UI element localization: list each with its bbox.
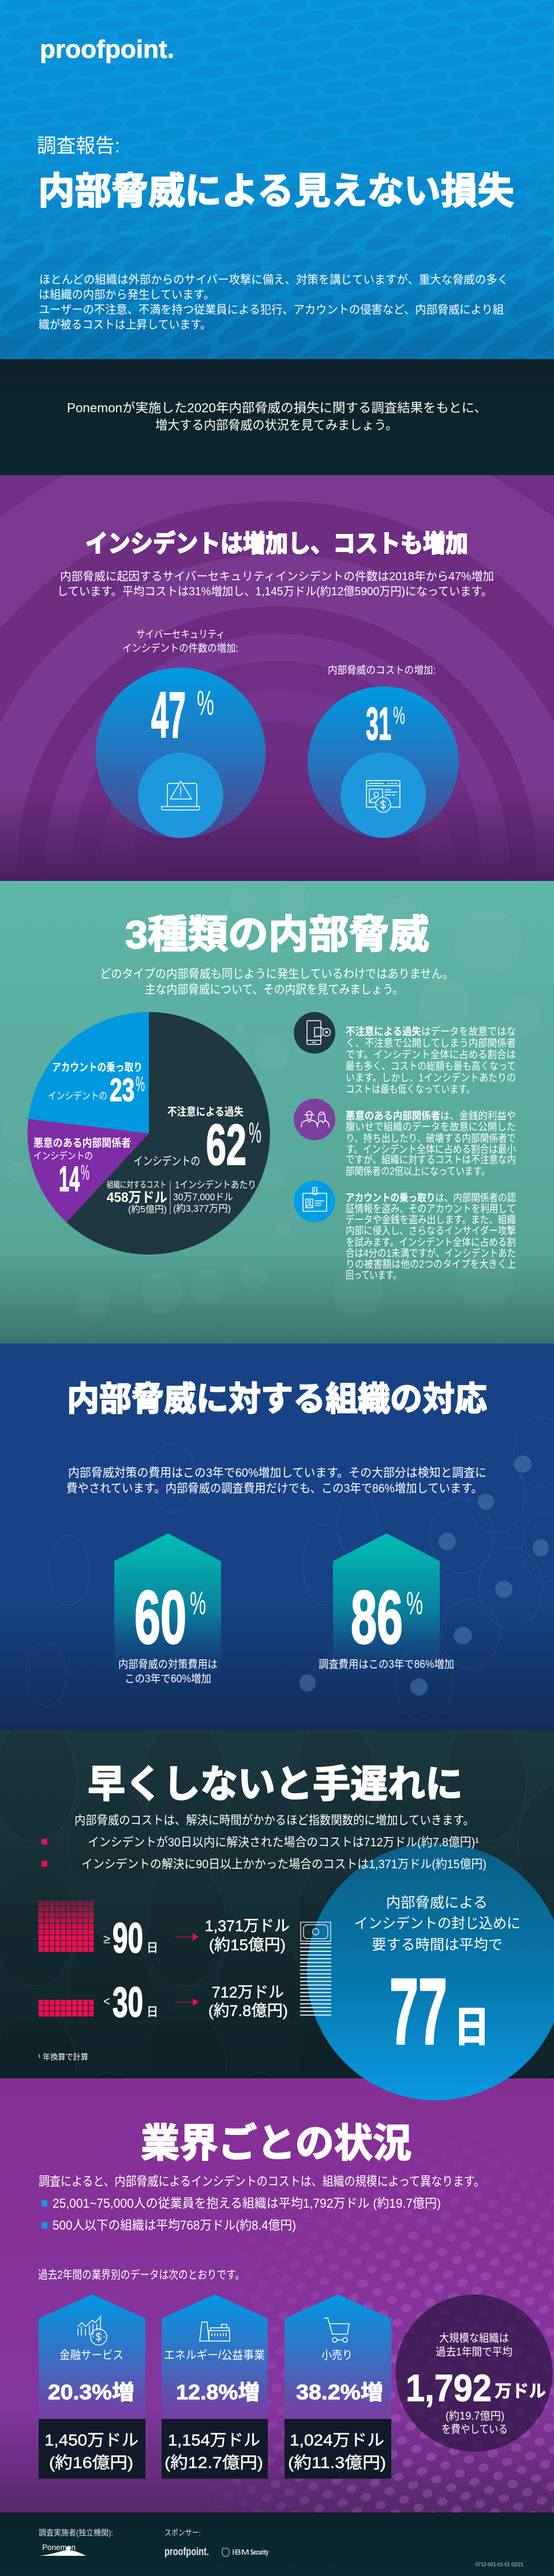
column: energy and utilities: 12.8%増: [176, 2380, 260, 2404]
logo: Ponemon: [39, 2543, 86, 2556]
callout: large organization spend: [396, 2294, 553, 2451]
careless cost figures: 458万ドル: [107, 1190, 167, 1205]
bullet: 30 days: インシデントが30日以内に解決された場合のコストは712万ドル(約7.8億円)¹: [88, 1836, 479, 1849]
panel: hero: [0, 0, 554, 359]
intro band text: 増大する内部脅威の状況を見てみましょう。: [155, 418, 398, 432]
stat circle: 31%: 31: [366, 698, 391, 749]
chart: 30 day row: <: [103, 1994, 110, 2008]
text: careless description: 不注意による過失はデータを故意ではな: [346, 1025, 516, 1037]
label: incident increase: インシデントの件数の増加:: [122, 643, 238, 654]
chart: 30 day row: (約7.8億円): [208, 2002, 288, 2019]
heading: 内部脅威に対する組織の対応: [67, 1380, 487, 1418]
paragraph: [100, 968, 454, 996]
text: account takeover description: 内部に侵入し、さらなるインサイダー攻撃: [346, 1224, 516, 1237]
chart: 30 day row: [38, 1979, 288, 2026]
logo: IBM Security: IBM: [232, 2548, 249, 2556]
text: careless description: です。インシデント全体に占める割合は: [346, 1048, 516, 1061]
intro text: は組織の内部から発生しています。: [39, 288, 215, 301]
stat circle: 47%: %: [197, 684, 214, 722]
panel: organizational response: [0, 1343, 554, 1730]
careless cost figures: 1インシデントあたり: [175, 1179, 256, 1190]
callout: large organization spend: (約19.7億円): [446, 2410, 504, 2422]
column: financial services: 金融サービス: [59, 2349, 123, 2362]
stat arrow: 86%: 86: [351, 1575, 403, 1659]
title: 内部脅威による見えない損失: [38, 170, 514, 212]
text: malicious description: す。インシデント全体に占める割合は最小: [346, 1143, 516, 1155]
text: account takeover description: りの被害額は他の2つのタイプを大きく上: [346, 1258, 516, 1270]
careless cost figures: 30万7,000ドル: [173, 1192, 233, 1203]
panel: three insider threat types: [0, 881, 554, 1343]
column: retail: [285, 2294, 391, 2479]
label: malicious insider: 悪意のある内部関係者: [33, 1137, 131, 1149]
heading: インシデントは増加し、コストも増加: [85, 530, 468, 557]
text: malicious description: り、持ち出したり、破壊する内部関係者で: [346, 1132, 516, 1144]
stat arrow: 86%: [319, 1533, 454, 1677]
bullet: 90 days: インシデントの解決に90日以上かかった場合のコストは1,371万ドル(約15億円): [81, 1858, 486, 1871]
stat circle: 47%: [96, 667, 265, 838]
bullet: large organizations: 25,001~75,000人の従業員を抱える組織は平均1,792万ドル (約19.7億円): [53, 2196, 441, 2211]
label: cost increase: 内部脅威のコストの増加:: [328, 664, 436, 676]
text: careless description: く、不注意で公開してしまう内部関係者: [346, 1037, 516, 1049]
chart: 30 day row: 日: [147, 2006, 158, 2019]
column: retail: (約11.3億円): [288, 2454, 386, 2472]
paragraph: [66, 1466, 486, 1495]
logo: Ponemon: Ponemon: [42, 2543, 76, 2552]
text: careless description: コストは最も低くなっています。: [346, 1083, 475, 1095]
subtitle: 調査報告:: [37, 135, 120, 157]
column: energy and utilities: 1,154万ドル: [168, 2431, 260, 2449]
column: energy and utilities: [162, 2294, 268, 2479]
column: financial services: (約16億円): [49, 2454, 133, 2472]
careless cost figures: 組織に対するコスト: [107, 1180, 166, 1190]
paragraph: 調査によると、内部脅威によるインシデントのコストは、組織の規模によって異なります。: [39, 2174, 485, 2189]
label: careless: 62: [206, 1112, 246, 1177]
pie chart: %: [136, 1072, 145, 1096]
subheading: 過去2年間の業界別のデータは次のとおりです。: [38, 2268, 245, 2282]
paragraph: しています。平均コストは31%増加し、1,145万ドル(約12億5900万円)になっています。: [57, 585, 492, 598]
label: careless: [133, 1106, 261, 1177]
label: malicious insider: %: [81, 1160, 89, 1184]
logo: proofpoint: proofpoint.: [164, 2546, 209, 2558]
stat arrow: 60%: [114, 1533, 221, 1685]
paragraph: 主な内部脅威について、その内訳を見てみましょう。: [145, 983, 403, 996]
chart: 90 day row: [38, 1901, 289, 1954]
text: malicious description: 部関係者の2倍以上になっています。: [346, 1165, 490, 1177]
logo: proofpoint: proofpoint.: [40, 35, 174, 64]
text: account takeover description: 回っています。: [346, 1269, 401, 1281]
callout: large organization spend: 過去1年間で平均: [436, 2346, 512, 2358]
chart: 30 day row: 712万ドル: [212, 1984, 284, 2001]
callout: large organization spend: 大規模な組織は: [439, 2332, 509, 2344]
label: account takeover: インシデントの: [48, 1090, 107, 1102]
logo: IBM Security: Security: [250, 2548, 268, 2556]
icon: stack of bills: [301, 1922, 331, 2017]
text: account takeover description: を試みます。インシデント全体に占める割: [346, 1236, 516, 1248]
intro band text: [67, 401, 487, 432]
heading: 早くしないと手遅れに: [88, 1763, 463, 1805]
paragraph: 費やされています。内部脅威の調査費用だけでも、この3年で86%増加しています。: [66, 1482, 482, 1495]
chart: 90 day row: ≥: [103, 1932, 110, 1946]
paragraph: 内部脅威対策の費用はこの3年で60%増加しています。その大部分は検知と調査に: [68, 1466, 486, 1480]
icon: factory: [200, 2322, 230, 2341]
intro text: ほとんどの組織は外部からのサイバー攻撃に備え、対策を講じていますが、重大な脅威の多く: [39, 273, 508, 286]
callout: large organization spend: を費やしている: [441, 2423, 508, 2436]
panel: Ponemon intro band: [0, 359, 554, 475]
paragraph: 内部脅威に起因するサイバーセキュリティインシデントの件数は2018年から47%増加: [60, 570, 494, 583]
text: malicious description: [346, 1110, 516, 1177]
stat circle: 31%: %: [393, 702, 405, 730]
text: careless description: います。しかし、1インシデントあたりの: [346, 1072, 516, 1084]
icon: phone and key: [294, 1012, 335, 1054]
document code: 0712-001-01-01 02/21: [476, 2562, 523, 2567]
column: retail: 1,024万ドル: [290, 2431, 384, 2449]
icon: shopping cart: [324, 2318, 349, 2342]
text: malicious description: ですが、組織に対するコストは不注意な内: [346, 1153, 516, 1166]
text: account takeover description: データや金銭を盗み出します。また、組織: [346, 1214, 516, 1226]
stat arrow: 60%: %: [190, 1585, 206, 1622]
icon: two people: [294, 1099, 335, 1140]
intro text: [39, 273, 508, 331]
chart: 90 day row: 日: [147, 1942, 158, 1955]
heading: 業界ごとの状況: [141, 2122, 411, 2166]
callout: average containment time 77 days: [307, 1843, 554, 2100]
callout: average containment time 77 days: 内部脅威による: [386, 1895, 488, 1911]
column: financial services: 1,450万ドル: [44, 2431, 138, 2449]
stat circle: 31%: [308, 686, 459, 838]
label: careless: インシデントの: [133, 1155, 200, 1168]
label: researcher: 調査実施者(独立機関):: [39, 2528, 113, 2537]
careless cost figures: (約5億円): [128, 1204, 167, 1215]
pie chart: [28, 1012, 270, 1255]
logo: IBM Security: [222, 2548, 268, 2556]
callout: average containment time 77 days: インシデントの封じ込めに: [354, 1916, 521, 1932]
chart: 90 day row: (約15億円): [209, 1936, 286, 1954]
waffle grid: 90 days: [38, 1901, 95, 1952]
label: malicious insider: [33, 1137, 131, 1199]
label: account takeover: アカウントの乗っ取り: [52, 1061, 143, 1074]
footnote: ¹ 年換算で計算: [38, 2052, 88, 2062]
text: careless description: 最も多く、コストの総額も最も高くなって: [346, 1060, 516, 1072]
callout: average containment time 77 days: 要する時間は平均で: [372, 1937, 503, 1953]
stat arrow: 86%: %: [406, 1585, 423, 1622]
stat circle: 47%: 47: [151, 679, 186, 751]
label: malicious insider: 14: [59, 1159, 80, 1199]
text: malicious description: 悪意のある内部関係者は、金銭的利益や: [346, 1110, 516, 1122]
waffle grid: 30 days: [38, 2000, 95, 2017]
heading: 3種類の内部脅威: [125, 913, 429, 957]
chart: 90 day row: 1,371万ドル: [205, 1917, 290, 1935]
column: retail: 小売り: [321, 2349, 353, 2362]
label: incident increase: サイバーセキュリティ: [136, 629, 225, 640]
slice: malicious 14%: [28, 1119, 149, 1222]
label: sponsors: スポンサー:: [164, 2528, 201, 2537]
label: malicious insider: インシデントの: [33, 1150, 93, 1162]
stat arrow: 60%: この3年で60%増加: [125, 1672, 211, 1685]
text: account takeover description: [346, 1192, 516, 1281]
bullet: small organizations: 500人以下の組織は平均768万ドル(約8.4億円): [53, 2218, 296, 2232]
pie chart: %: [249, 1117, 261, 1149]
paragraph: [57, 570, 494, 598]
column: energy and utilities: (約12.7億円): [164, 2454, 263, 2472]
intro text: ユーザーの不注意、不満を持つ従業員による犯行、アカウントの侵害など、内部脅威により組: [39, 303, 504, 316]
panel: time to contain: [0, 1730, 554, 2100]
column: energy and utilities: エネルギー/公益事業: [164, 2349, 265, 2362]
careless cost figures: (約3,377万円): [173, 1203, 231, 1214]
label: account takeover: [48, 1061, 145, 1108]
column: financial services: 20.3%増: [48, 2380, 134, 2404]
intro band text: Ponemonが実施した2020年内部脅威の損失に関する調査結果をもとに、: [67, 401, 487, 415]
text: account takeover description: アカウントの乗っ取りは、内部関係者の認: [346, 1192, 516, 1204]
arrow: [175, 1933, 199, 1941]
panel: industry status: [0, 2078, 554, 2512]
slice: careless 62%: [66, 1012, 270, 1255]
stat arrow: 60%: 内部脅威の対策費用は: [118, 1658, 218, 1671]
slice: account takeover 23%: [28, 1012, 149, 1133]
icon: profile and dollar: [366, 781, 400, 812]
text: malicious description: 腹いせで組織のデータを故意に公開した: [346, 1121, 516, 1133]
column: retail: 38.2%増: [296, 2380, 383, 2404]
callout: average containment time 77 days: 日: [454, 2004, 489, 2051]
column: financial services: [39, 2294, 145, 2479]
icon: ID badge: [294, 1181, 335, 1222]
callout: average containment time 77 days: 77: [390, 1959, 447, 2064]
icon: chart and coin: [78, 2316, 107, 2345]
stat arrow: 60%: 60: [134, 1575, 186, 1659]
arrow: [175, 1999, 199, 2006]
label: account takeover: 23: [110, 1072, 134, 1108]
label: incident increase: [122, 629, 238, 654]
chart: 30 day row: 30: [113, 1979, 143, 2026]
stat arrow: 86%: 調査費用はこの3年で86%増加: [319, 1658, 454, 1671]
text: account takeover description: 合は4分の1未満ですが、インシデントあた: [346, 1247, 516, 1259]
icon: laptop warning: [162, 781, 200, 810]
callout: large organization spend: 1,792: [406, 2366, 492, 2409]
paragraph: 内部脅威のコストは、解決に時間がかかるほど指数関数的に増加していきます。: [74, 1814, 474, 1827]
text: careless description: [346, 1025, 516, 1095]
label: careless: 不注意による過失: [167, 1106, 244, 1118]
intro text: 織が被るコストは上昇しています。: [39, 318, 211, 331]
callout: large organization spend: 万ドル: [495, 2382, 546, 2401]
chart: 90 day row: 90: [113, 1915, 143, 1962]
panel: footer: [0, 2512, 554, 2576]
careless cost figures: [107, 1179, 256, 1215]
text: account takeover description: 証情報を盗み、そのアカウントを利用して: [346, 1203, 516, 1215]
paragraph: どのタイプの内部脅威も同じように発生しているわけではありません。: [100, 968, 454, 981]
panel: incidents and cost up: [0, 475, 554, 881]
